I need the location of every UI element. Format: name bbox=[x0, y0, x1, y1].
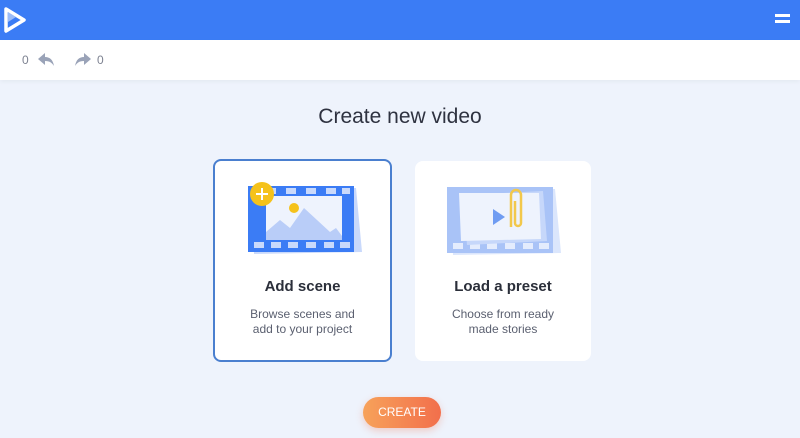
card heading: Load a preset bbox=[454, 278, 552, 295]
icon: redo bbox=[75, 53, 91, 66]
toolbar bbox=[0, 40, 800, 80]
panel: add scene bbox=[213, 159, 392, 362]
create button bbox=[363, 397, 441, 428]
undo counter: 0 bbox=[22, 53, 29, 67]
panel: load a preset bbox=[415, 161, 591, 361]
icon: film with paperclip bbox=[447, 187, 561, 255]
card description: Choose from ready bbox=[452, 307, 554, 321]
icon: menu bbox=[775, 14, 790, 23]
icon: logo bbox=[4, 7, 26, 33]
card description: add to your project bbox=[253, 322, 352, 336]
create button: CREATE bbox=[378, 405, 426, 419]
card heading: Add scene bbox=[265, 278, 340, 295]
icon: undo bbox=[38, 53, 54, 66]
card description: made stories bbox=[469, 322, 537, 336]
card description bbox=[452, 307, 554, 336]
header bar bbox=[0, 0, 800, 40]
card description bbox=[250, 307, 355, 336]
redo counter: 0 bbox=[97, 53, 104, 67]
icon: film with image bbox=[248, 182, 362, 254]
title: Create new video bbox=[318, 105, 482, 128]
card description: Browse scenes and bbox=[250, 307, 355, 321]
